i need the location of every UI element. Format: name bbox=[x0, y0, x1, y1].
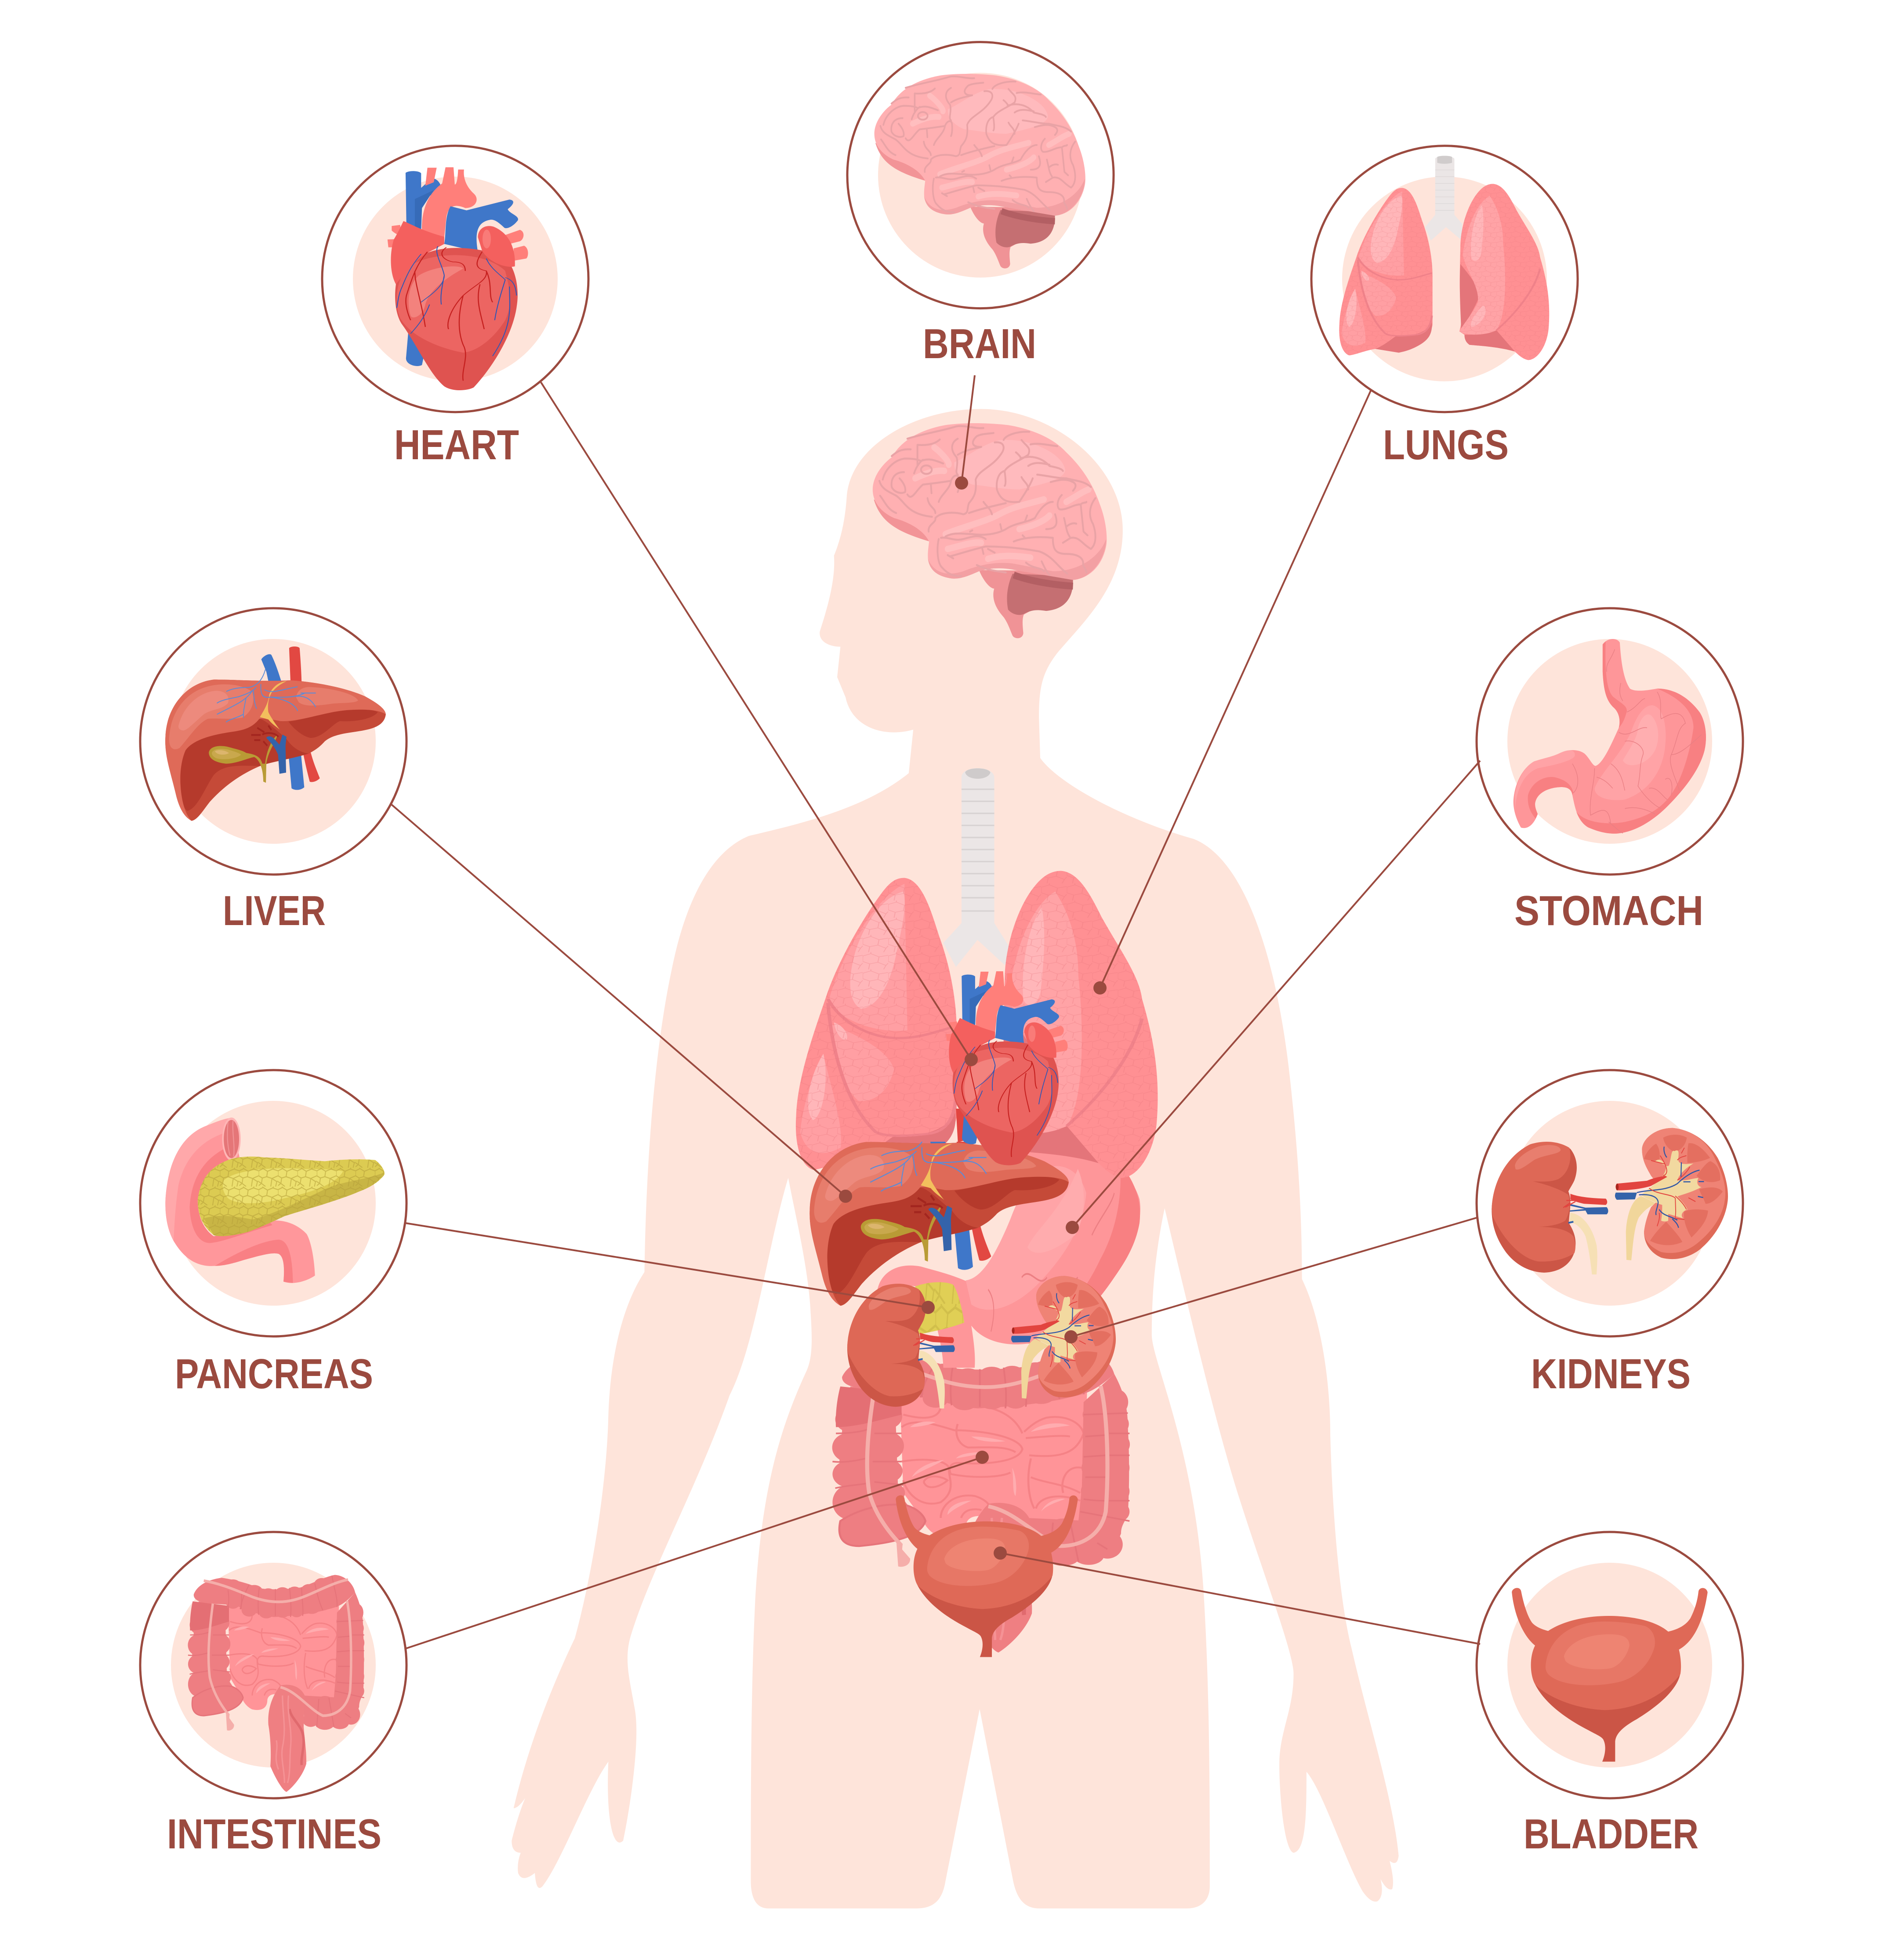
peach disc bbox=[353, 177, 558, 381]
label: LUNGS bbox=[1383, 421, 1509, 468]
peach disc bbox=[171, 1563, 376, 1768]
ring bbox=[1311, 146, 1578, 412]
panel: liver bbox=[140, 608, 407, 934]
label: BRAIN bbox=[923, 320, 1036, 367]
peach disc bbox=[171, 639, 376, 844]
body organ: heart bbox=[946, 971, 1068, 1165]
peach disc bbox=[1507, 1563, 1712, 1768]
ring bbox=[140, 1532, 407, 1798]
body organ: liver bbox=[809, 1142, 1069, 1306]
icon: brain bbox=[875, 74, 1085, 269]
body organ: brain bbox=[873, 423, 1107, 638]
panel: stomach bbox=[1477, 608, 1743, 934]
icon: intestines bbox=[188, 1575, 364, 1792]
body organ: left kidney bbox=[847, 1284, 955, 1408]
panel: kidneys bbox=[1477, 1070, 1743, 1397]
label: STOMACH bbox=[1514, 887, 1703, 934]
icon: stomach bbox=[1514, 639, 1706, 834]
panel: bladder bbox=[1477, 1532, 1743, 1858]
label: INTESTINES bbox=[167, 1811, 381, 1858]
label: LIVER bbox=[223, 887, 326, 934]
body organ: intestines bbox=[832, 1350, 1130, 1652]
leader: liver bbox=[391, 804, 852, 1203]
peach disc bbox=[1342, 177, 1547, 381]
icon: bladder bbox=[1512, 1588, 1708, 1762]
icon: kidneys bbox=[1492, 1128, 1728, 1274]
icon: heart bbox=[388, 167, 528, 390]
icon: trachea bbox=[1425, 156, 1462, 240]
leader: lungs bbox=[1093, 390, 1371, 995]
human body silhouette bbox=[512, 409, 1399, 1909]
label: KIDNEYS bbox=[1531, 1350, 1691, 1397]
icon: liver bbox=[165, 646, 386, 821]
label: HEART bbox=[394, 421, 519, 468]
leader lines and dots bbox=[391, 375, 1480, 1648]
leader: stomach bbox=[1066, 761, 1480, 1234]
peach disc bbox=[878, 73, 1083, 278]
leader: intestines bbox=[406, 1451, 989, 1648]
body organ: pancreas bbox=[915, 1282, 964, 1335]
body organ: lungs bbox=[796, 871, 1158, 1178]
body organ: right kidney bbox=[1011, 1276, 1116, 1398]
peach disc bbox=[1507, 639, 1712, 844]
ring bbox=[847, 42, 1114, 309]
label: BLADDER bbox=[1524, 1811, 1699, 1858]
panel: pancreas bbox=[140, 1070, 407, 1397]
panel: intestines bbox=[140, 1532, 407, 1858]
icon: lungs bbox=[1339, 184, 1549, 360]
panel: heart bbox=[322, 146, 588, 468]
icon: pancreas bbox=[165, 1118, 385, 1283]
body organ: bladder bbox=[896, 1495, 1078, 1657]
ring bbox=[140, 608, 407, 875]
ring bbox=[140, 1070, 407, 1336]
ring bbox=[1477, 1070, 1743, 1336]
ring bbox=[322, 146, 588, 412]
label: PANCREAS bbox=[175, 1350, 373, 1397]
leader: kidneys bbox=[1064, 1218, 1477, 1343]
peach disc bbox=[171, 1101, 376, 1306]
leader: bladder bbox=[994, 1546, 1480, 1644]
body vessel behind heart bbox=[956, 1109, 966, 1143]
panel: lungs bbox=[1311, 146, 1578, 468]
leader: heart bbox=[541, 382, 978, 1066]
body organ: stomach bbox=[878, 1109, 1140, 1368]
leader: pancreas bbox=[405, 1223, 935, 1314]
panel: brain bbox=[847, 42, 1114, 367]
ring bbox=[1477, 608, 1743, 875]
leader: brain bbox=[955, 375, 975, 490]
peach disc bbox=[1507, 1101, 1712, 1306]
ring bbox=[1477, 1532, 1743, 1798]
body organ: trachea bbox=[943, 768, 1011, 967]
